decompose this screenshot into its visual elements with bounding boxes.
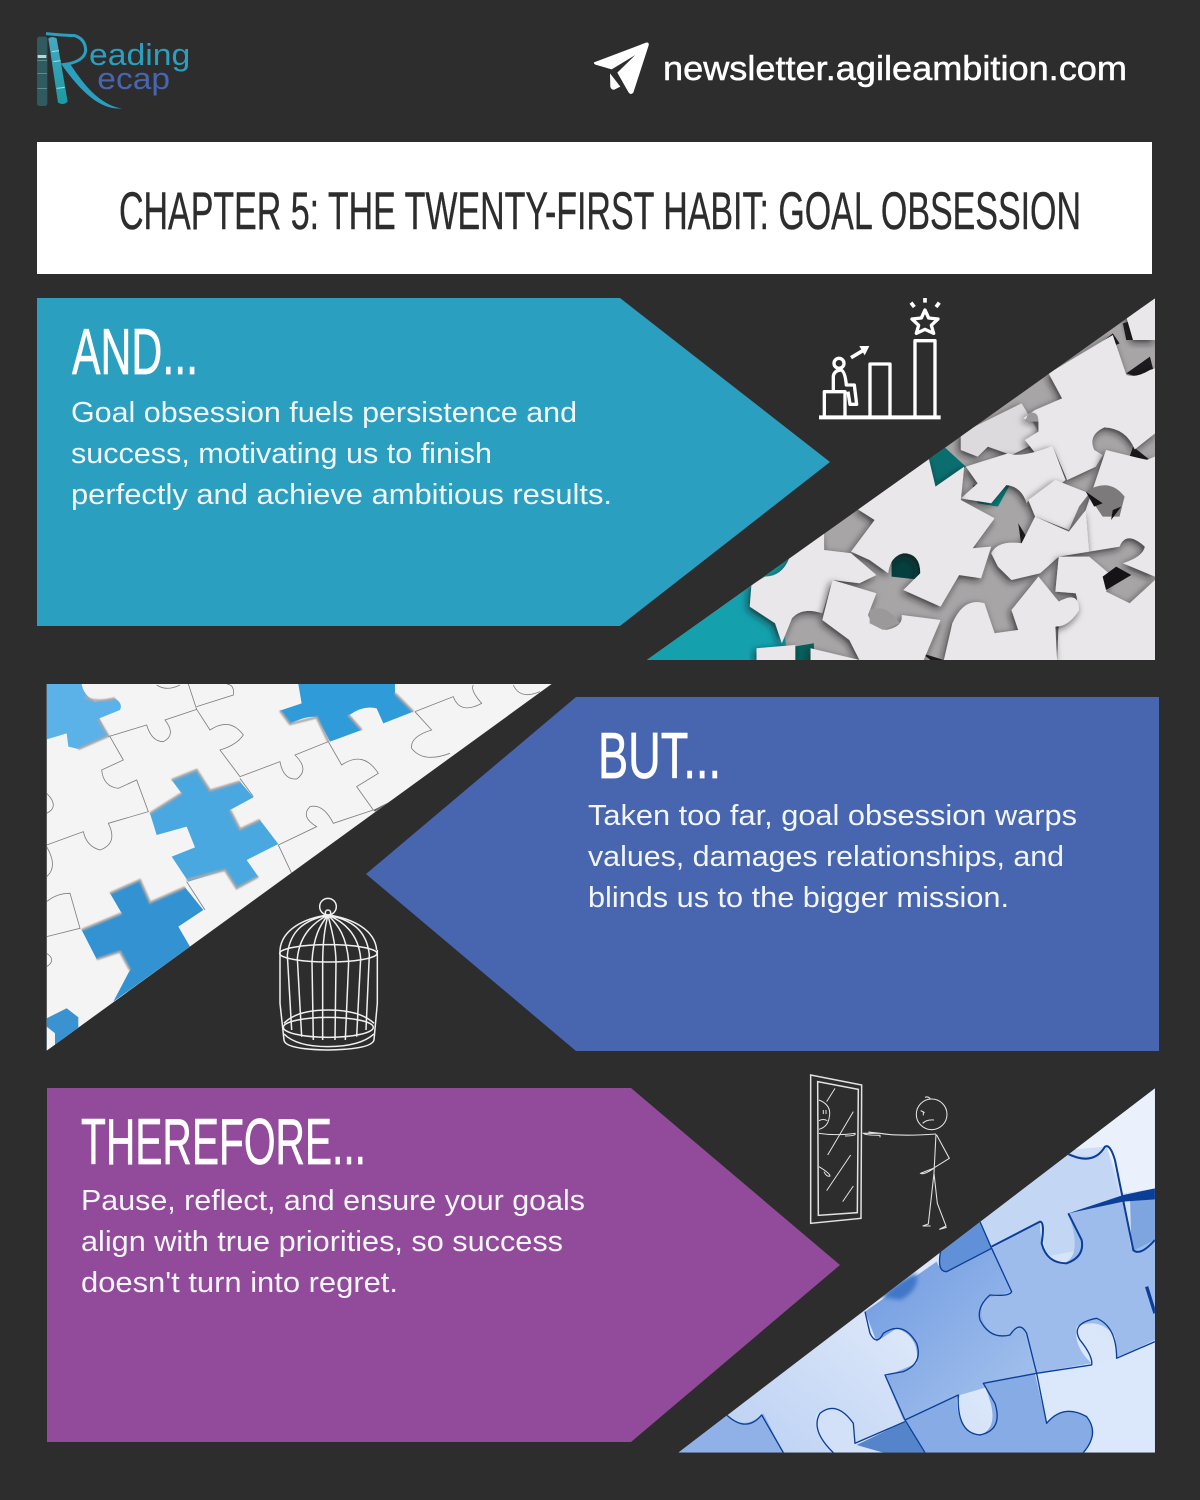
- blue gaps: [47, 684, 413, 1051]
- panel: THEREFORE: [47, 1088, 840, 1442]
- icon: bird cage: [280, 898, 377, 1050]
- logo wordmark: [46, 34, 190, 109]
- text: AND body: Goal obsession fuels persistence and: [71, 397, 577, 429]
- text: BUT body: values, damages relationships, and: [588, 841, 1064, 873]
- dark tip: [374, 802, 389, 812]
- upper middle dark: [939, 1222, 992, 1272]
- text: BUT body: Taken too far, goal obsession warps: [588, 800, 1077, 832]
- panel: AND: [37, 298, 830, 626]
- website url: newsletter.agileambition.com: [663, 50, 1127, 88]
- puzzle pieces: [961, 403, 1038, 457]
- figure: [863, 1097, 949, 1229]
- heading: AND: AND...: [72, 315, 198, 388]
- icon: paper plane: [594, 43, 649, 94]
- icon: books: [37, 37, 68, 106]
- central medium piece: [865, 1248, 1035, 1420]
- icon: stick figure at mirror: [811, 1075, 949, 1229]
- logo wordmark: eading: [89, 38, 190, 72]
- mirror: [811, 1075, 862, 1223]
- panel: BUT: [366, 697, 1159, 1051]
- piece outlines: [47, 684, 540, 967]
- photo: white jigsaw with blue gaps: [40, 680, 560, 1057]
- heading: THEREFORE: THEREFORE...: [81, 1105, 366, 1178]
- piece shadows: [78, 693, 413, 970]
- heading: BUT: BUT...: [598, 719, 721, 792]
- icon: climbing bars with star: [819, 298, 941, 417]
- title banner: [37, 142, 1152, 274]
- text: THEREFORE body: align with true priorities, so success: [81, 1226, 563, 1258]
- text: AND body: perfectly and achieve ambitious results.: [71, 479, 612, 511]
- photo: scattered white puzzle pieces: [640, 290, 1167, 667]
- text: BUT body: [588, 800, 1077, 914]
- bottom pieces: [905, 1373, 1093, 1453]
- dark gaps: [922, 317, 1155, 660]
- logo: Reading Recap: [37, 34, 190, 109]
- text: AND body: success, motivating us to finish: [71, 438, 492, 470]
- teal holes: [925, 448, 966, 486]
- text: BUT body: blinds us to the bigger mission.: [588, 882, 1009, 914]
- teal corner: [647, 583, 755, 660]
- photo: blue jigsaw close-up: [678, 1088, 1155, 1453]
- text: THEREFORE body: [81, 1185, 585, 1299]
- text: THEREFORE body: Pause, reflect, and ensure your goals: [81, 1185, 585, 1217]
- top right bright piece: [1076, 1088, 1155, 1194]
- text: AND body: [71, 397, 612, 511]
- text: THEREFORE body: doesn't turn into regret.: [81, 1267, 398, 1299]
- dark edges: [727, 1146, 1155, 1453]
- logo wordmark: ecap: [97, 62, 170, 96]
- right medium piece: [982, 1197, 1155, 1373]
- hole details: [1086, 485, 1125, 517]
